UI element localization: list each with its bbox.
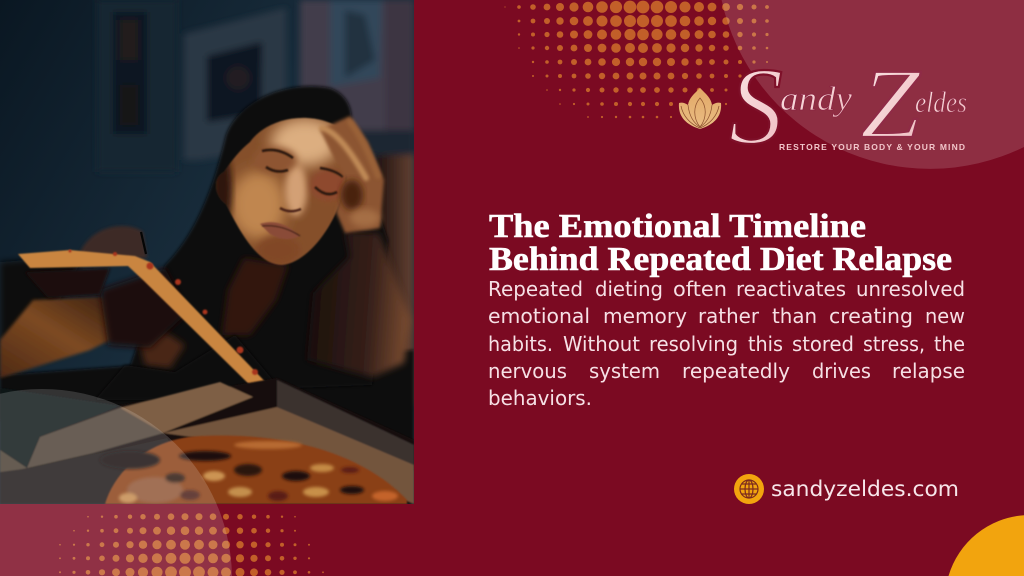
body text: this — [748, 332, 783, 356]
body text: relapse — [892, 359, 965, 383]
body text: repeatedly — [682, 359, 790, 383]
body text: reactivates — [736, 277, 846, 301]
photo: tired woman holding pizza slice — [0, 0, 415, 504]
title: Behind Repeated Diet Relapse — [489, 241, 952, 278]
body text: unresolved — [856, 277, 965, 301]
body text — [488, 277, 965, 410]
body text: behaviors. — [488, 386, 592, 410]
body text: stress, — [863, 332, 925, 356]
body text: habits. — [488, 332, 553, 356]
logo: script signature: andy — [780, 81, 853, 118]
logo: tagline: RESTORE YOUR BODY & YOUR MIND — [779, 142, 965, 152]
halftone dots: bottom — [59, 513, 324, 576]
body text: creating — [829, 304, 913, 328]
pizza — [105, 435, 407, 504]
yellow corner circle — [948, 515, 1024, 576]
body text: system — [589, 359, 660, 383]
body text: emotional — [488, 304, 590, 328]
body text: stored — [792, 332, 854, 356]
website url: sandyzeldes.com — [771, 477, 959, 501]
body text: memory — [603, 304, 687, 328]
pizza slice — [18, 249, 265, 384]
body text: Without — [563, 332, 640, 356]
logo: lotus icon — [679, 88, 721, 129]
near arm and hand — [0, 296, 111, 379]
body text: new — [925, 304, 965, 328]
face — [216, 116, 346, 266]
translucent circle: bottom left — [0, 389, 232, 576]
body text: drives — [812, 359, 871, 383]
hair — [129, 84, 390, 366]
body text: than — [772, 304, 817, 328]
icon: globe — [734, 474, 764, 504]
halftone dots: top — [504, 1, 769, 118]
logo: script signature: S — [729, 45, 783, 167]
body text: the — [934, 332, 965, 356]
body text: often — [673, 277, 727, 301]
body text: rather — [698, 304, 760, 328]
body text: nervous — [488, 359, 567, 383]
translucent circle: top right — [722, 0, 1024, 169]
facial features — [260, 150, 343, 239]
neck and chest — [222, 258, 288, 335]
far forearm — [307, 232, 411, 377]
logo: script signature: eldes — [915, 86, 967, 119]
pizza box — [0, 378, 414, 504]
couch shadow — [0, 258, 80, 341]
shoulder — [80, 226, 147, 260]
body text: resolving — [649, 332, 738, 356]
body text: Repeated — [488, 277, 583, 301]
title — [489, 208, 952, 278]
logo: script signature — [729, 45, 967, 167]
hand on forehead — [320, 116, 384, 233]
title: The Emotional Timeline — [489, 208, 866, 245]
logo: script signature: Z — [860, 48, 921, 159]
body text: dieting — [595, 277, 663, 301]
